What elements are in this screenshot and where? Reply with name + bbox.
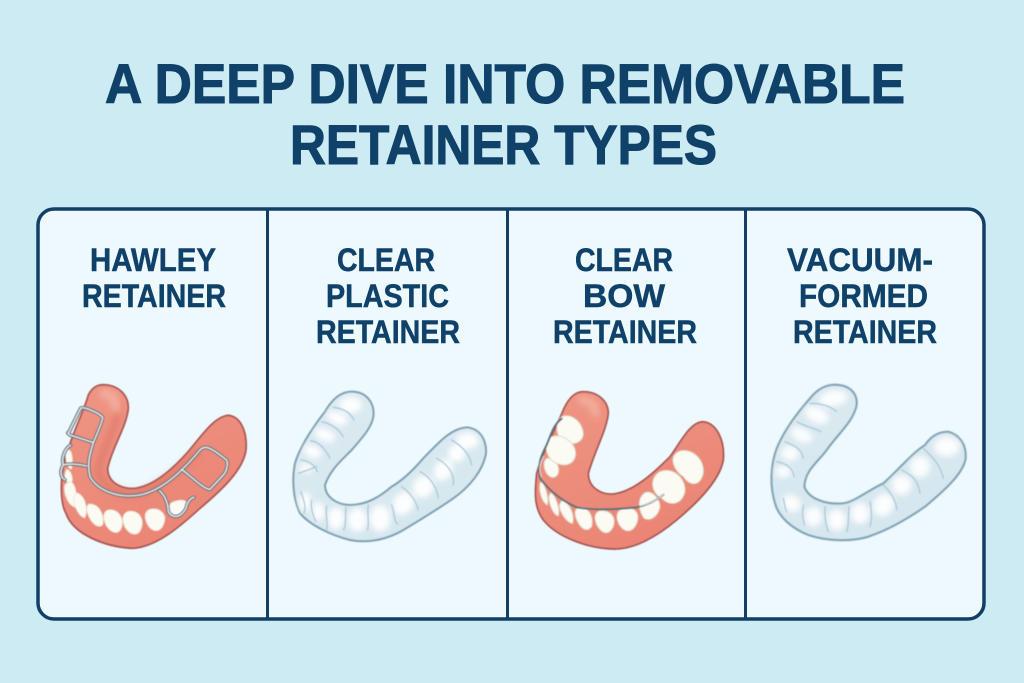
heading: Clear plastic retainer: CLEAR (337, 242, 435, 278)
heading: Hawley retainer: HAWLEY (90, 242, 216, 278)
heading: Clear plastic retainer: PLASTIC (326, 278, 449, 314)
panel container (38, 209, 984, 619)
tooth divisions (777, 403, 943, 532)
panel: Clear plastic retainer (293, 242, 486, 541)
heading: Clear bow retainer: CLEAR (575, 242, 673, 278)
heading: Hawley retainer: RETAINER (82, 278, 226, 314)
illustration: clear plastic aligner (293, 392, 486, 541)
tooth highlights (775, 388, 959, 531)
heading: Hawley retainer (82, 242, 226, 314)
illustration: Hawley retainer with gums and wire (61, 385, 246, 548)
heading: Clear bow retainer: BOW (583, 278, 666, 314)
tooth highlights (299, 397, 479, 532)
heading: Clear bow retainer: RETAINER (553, 314, 697, 350)
heading: Clear plastic retainer (316, 242, 460, 350)
teeth (64, 449, 187, 534)
title: RETAINER TYPES (290, 113, 717, 176)
panel: Vacuum-formed retainer (771, 242, 966, 540)
wire clasp (61, 408, 227, 516)
heading: Vacuum-formed retainer: VACUUM- (787, 242, 933, 278)
panel: Hawley retainer (61, 242, 246, 548)
heading: Clear plastic retainer: RETAINER (316, 314, 460, 350)
illustration: clear bow retainer with gums and teeth (535, 392, 724, 549)
tooth divisions (298, 407, 472, 530)
teeth (540, 416, 703, 533)
illustration: vacuum-formed aligner (771, 385, 966, 540)
heading: Clear bow retainer (553, 242, 697, 350)
title (105, 52, 905, 176)
title: A DEEP DIVE INTO REMOVABLE (105, 52, 905, 115)
heading: Vacuum-formed retainer: FORMED (799, 278, 928, 314)
heading: Vacuum-formed retainer (787, 242, 937, 350)
panel: Clear bow retainer (535, 242, 724, 549)
heading: Vacuum-formed retainer: RETAINER (793, 314, 937, 350)
bow wire (539, 419, 663, 509)
